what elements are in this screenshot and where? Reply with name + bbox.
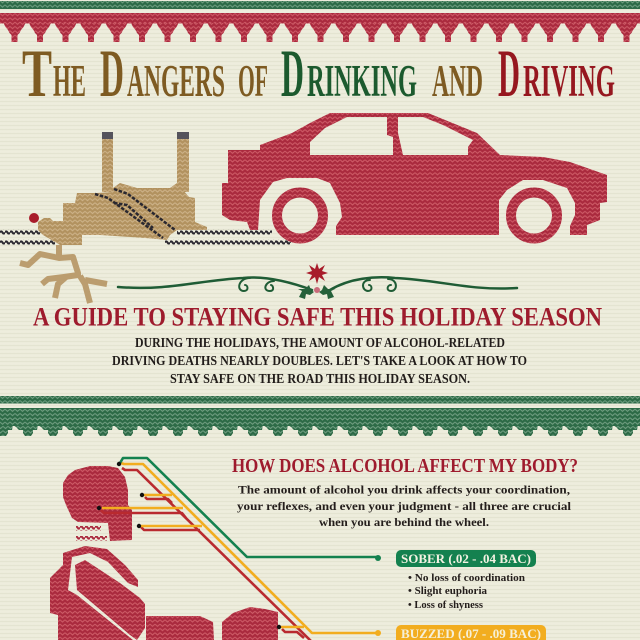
sober bullet list: • Loss of shyness	[408, 600, 483, 611]
title: RINKING	[307, 56, 417, 106]
neck	[76, 526, 107, 541]
harness stripes	[95, 189, 175, 238]
poinsettia	[306, 263, 328, 284]
body	[38, 183, 207, 245]
red line	[101, 468, 315, 640]
thigh	[146, 616, 214, 640]
reindeer	[20, 132, 207, 303]
shoulder and arm	[50, 546, 138, 640]
car	[222, 113, 607, 238]
title: HE	[53, 56, 86, 106]
title: AND	[432, 56, 483, 106]
legs	[20, 245, 107, 303]
red nose	[29, 213, 39, 223]
torso	[75, 560, 145, 640]
road lines	[0, 230, 291, 244]
knee	[222, 607, 278, 640]
head	[63, 466, 132, 541]
flourish with poinsettia and holly	[118, 263, 517, 299]
intro text: STAY SAFE ON THE ROAD THIS HOLIDAY SEASON.	[170, 371, 470, 386]
title: D	[100, 35, 124, 111]
intro text: DRIVING DEATHS NEARLY DOUBLES. LET'S TAKE A LOOK AT HOW TO	[112, 353, 527, 368]
paragraph	[237, 482, 572, 529]
antlers	[102, 132, 189, 192]
paragraph: when you are behind the wheel.	[319, 515, 489, 529]
title	[22, 35, 615, 111]
sober bullet list: • Slight euphoria	[408, 586, 488, 597]
intro text: DURING THE HOLIDAYS, THE AMOUNT OF ALCOHOL-RELATED	[135, 335, 505, 350]
paragraph: your reflexes, and even your judgment - all three are crucial	[237, 499, 572, 513]
title: OF	[238, 56, 268, 106]
connector lines	[101, 458, 378, 640]
top knit border	[0, 1, 640, 43]
connector end dots	[97, 462, 381, 636]
green line	[120, 458, 378, 557]
title: D	[498, 35, 520, 111]
orange line	[102, 463, 378, 633]
wheels	[277, 192, 323, 238]
heading: alcohol: HOW DOES ALCOHOL AFFECT MY BODY?	[232, 456, 578, 477]
person figure	[50, 466, 278, 640]
title: T	[22, 35, 52, 111]
sober bullet list: • No loss of coordination	[408, 573, 525, 584]
sober label: SOBER (.02 - .04 BAC)	[401, 551, 531, 566]
sober bullet list	[408, 573, 525, 611]
intro text	[112, 335, 527, 386]
paragraph: The amount of alcohol you drink affects your coordination,	[238, 482, 570, 496]
holly	[298, 285, 335, 299]
title: D	[281, 35, 304, 111]
title: ANGERS	[127, 56, 225, 106]
middle knit border	[0, 396, 640, 437]
